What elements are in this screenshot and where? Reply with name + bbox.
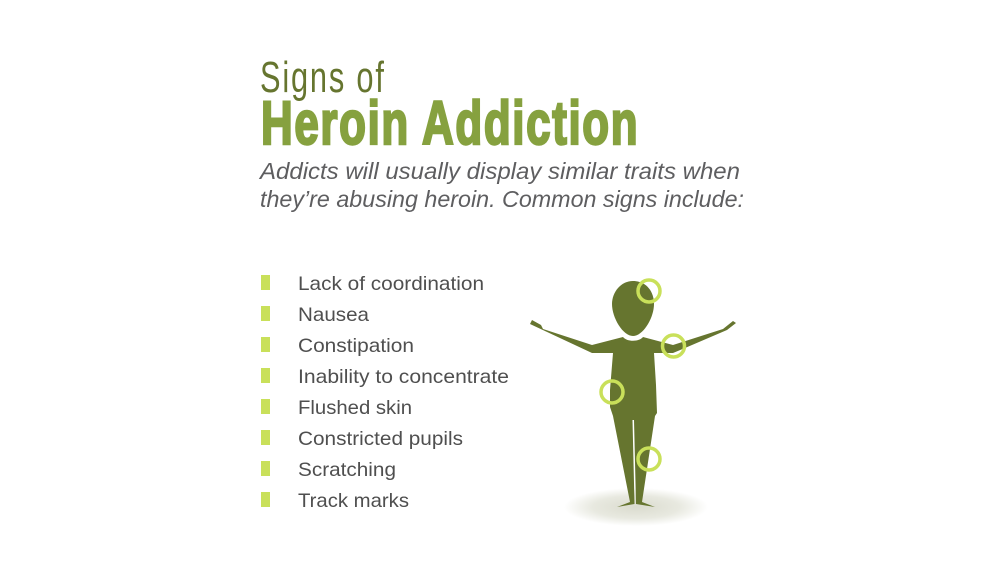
intro text: they’re abusing heroin. Common signs include: bbox=[260, 186, 744, 212]
item: Inability to concentrate: Inability to concentrate bbox=[298, 366, 509, 388]
arms and torso bbox=[530, 320, 736, 507]
ground shadow bbox=[564, 488, 708, 526]
item: Constipation: Constipation bbox=[298, 335, 414, 357]
item: Track marks: Track marks bbox=[298, 490, 409, 512]
icon: person silhouette bbox=[530, 281, 736, 507]
head bbox=[612, 281, 654, 336]
item: Scratching: Scratching bbox=[298, 459, 396, 481]
intro text bbox=[258, 158, 744, 212]
intro text: Addicts will usually display similar traits when bbox=[258, 158, 740, 184]
title line: Heroin Addiction: Heroin Addiction bbox=[261, 90, 638, 158]
item: Nausea: Nausea bbox=[298, 304, 369, 326]
symptom marker circles bbox=[601, 280, 684, 470]
list of signs bbox=[261, 273, 509, 512]
item: Flushed skin: Flushed skin bbox=[298, 397, 412, 419]
title bbox=[260, 54, 638, 158]
title line: Signs of: Signs of bbox=[260, 54, 384, 102]
item: Scratching bbox=[261, 459, 396, 481]
item: Constricted pupils: Constricted pupils bbox=[298, 428, 463, 450]
marker: arm bbox=[662, 335, 684, 357]
marker: leg bbox=[638, 448, 660, 470]
item: Nausea bbox=[261, 304, 369, 326]
marker: head bbox=[638, 280, 660, 302]
item: Lack of coordination: Lack of coordination bbox=[298, 273, 484, 295]
marker: torso bbox=[601, 381, 623, 403]
figure illustration bbox=[530, 280, 736, 526]
